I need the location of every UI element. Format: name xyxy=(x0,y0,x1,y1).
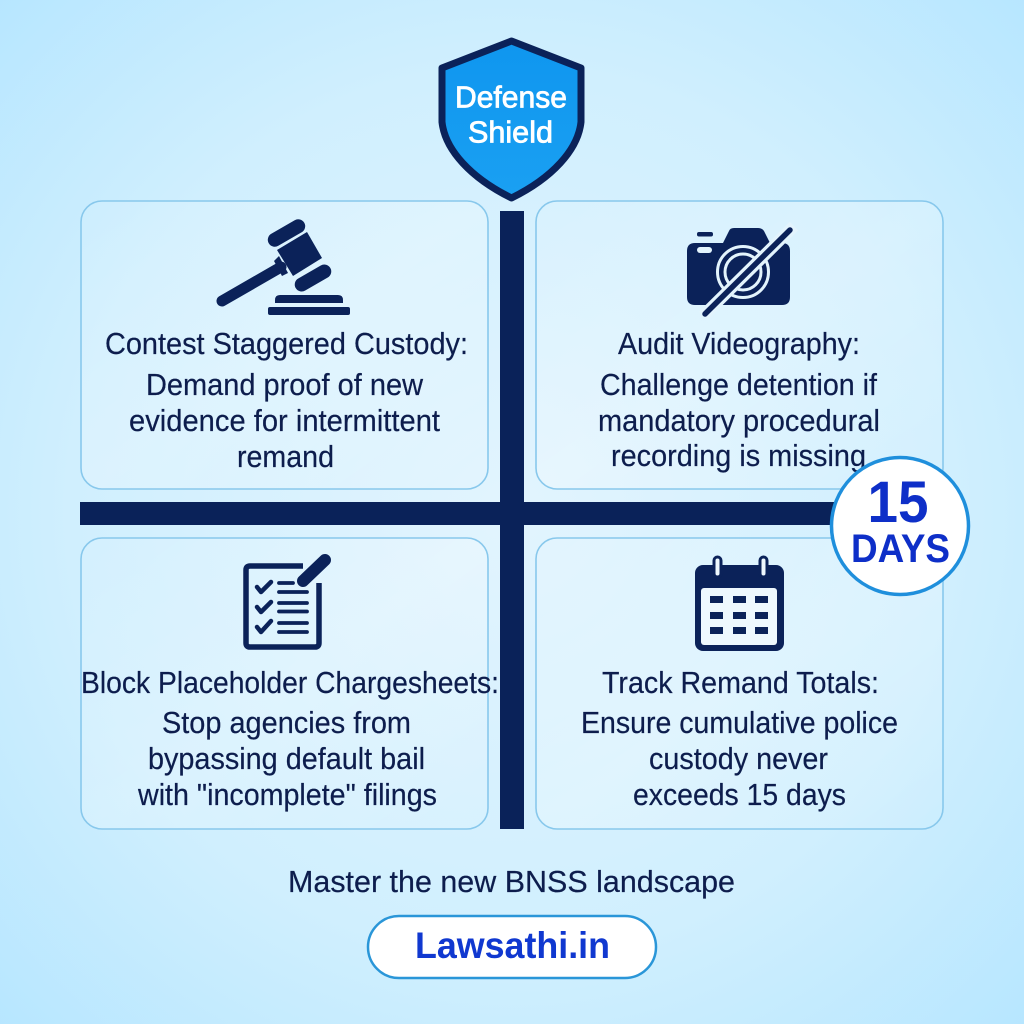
text block xyxy=(137,705,437,812)
shield title: Shield xyxy=(468,114,553,150)
text block: Ensure cumulative police xyxy=(581,705,898,740)
icon: calendar xyxy=(695,557,784,651)
shield xyxy=(442,41,581,198)
text block: remand xyxy=(237,439,334,474)
heading: Contest Staggered Custody: xyxy=(105,326,468,361)
panel: audit videography xyxy=(536,201,943,489)
call to action pill xyxy=(368,916,656,978)
text block: exceeds 15 days xyxy=(633,777,846,812)
text block: mandatory procedural xyxy=(598,403,880,438)
heading: Audit Videography: xyxy=(618,326,860,361)
icon: gavel xyxy=(222,217,350,315)
tagline: Master the new BNSS landscape xyxy=(288,864,735,899)
call to action pill: Lawsathi.in xyxy=(415,925,610,966)
text block: Challenge detention if xyxy=(600,367,877,402)
text block: custody never xyxy=(649,741,828,776)
text block: Stop agencies from xyxy=(162,705,411,740)
heading: Track Remand Totals: xyxy=(602,665,879,700)
panel: contest staggered custody xyxy=(81,201,488,489)
text block: Demand proof of new xyxy=(146,367,424,402)
icon: camera crossed out xyxy=(687,226,794,316)
text block: with "incomplete" filings xyxy=(137,777,437,812)
text block: bypassing default bail xyxy=(148,741,425,776)
shield title: Defense xyxy=(455,80,567,114)
icon: checklist xyxy=(246,560,325,647)
text block: evidence for intermittent xyxy=(129,403,440,438)
text block: recording is missing xyxy=(611,438,866,473)
cross divider xyxy=(80,211,850,829)
badge: 15 days: DAYS xyxy=(851,527,950,571)
shield title xyxy=(455,80,567,150)
text block xyxy=(581,705,898,812)
text block xyxy=(129,367,440,474)
text block xyxy=(598,367,880,473)
panel: block placeholder chargesheets xyxy=(81,538,499,829)
panel: track remand totals xyxy=(536,538,943,829)
heading: Block Placeholder Chargesheets: xyxy=(81,665,499,700)
badge: 15 days xyxy=(832,458,968,594)
badge: 15 days: 15 xyxy=(868,470,928,535)
